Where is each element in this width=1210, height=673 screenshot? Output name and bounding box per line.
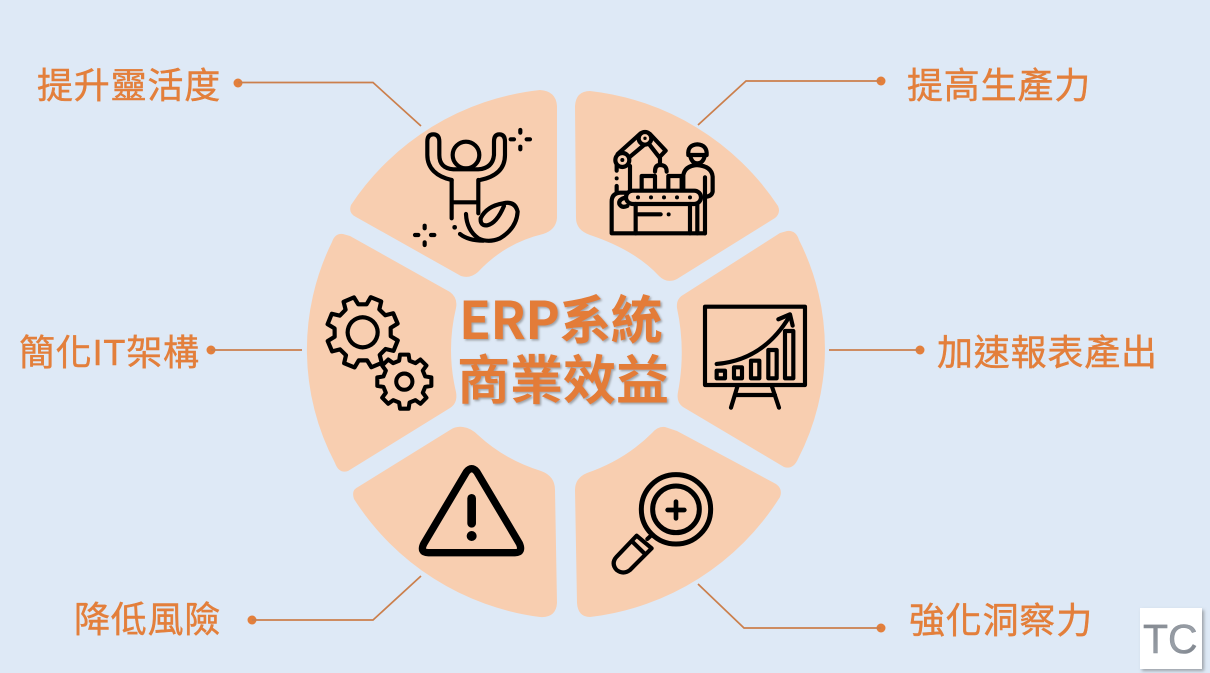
logo: TC: TC [1143,616,1198,662]
connector: 強化洞察力 [698,584,886,632]
icon: presentation board with growth chart [705,307,805,408]
icon: factory robot and worker [612,132,713,233]
icon: jumping person [415,130,530,245]
segment: bottom right [575,427,781,617]
label: 強化洞察力: 強化洞察力 [909,600,1093,641]
connector: 簡化IT架構 [206,346,302,354]
title: ERP系統 [459,279,662,354]
label: 提升靈活度: 提升靈活度 [37,65,221,106]
label: 加速報表產出: 加速報表產出 [937,332,1158,373]
segment: left [307,234,456,472]
segment: right [677,231,825,468]
connector: 提高生產力 [698,76,886,125]
segment: bottom left [353,427,557,617]
segment: top right [575,91,779,281]
icon: magnifying glass [614,475,711,572]
icon: warning triangle [422,469,521,553]
icon: gears [316,286,431,409]
label: 提高生產力: 提高生產力 [907,65,1091,106]
title: 商業效益 [457,339,669,415]
connector: 降低風險 [248,576,421,624]
title [457,279,669,415]
label: 降低風險: 降低風險 [74,599,221,640]
label: 簡化IT架構: 簡化IT架構 [19,332,200,373]
connector: 加速報表產出 [829,346,924,354]
logo: TC [1140,608,1202,669]
connector: 提升靈活度 [234,78,421,126]
segment: top left [350,90,557,277]
